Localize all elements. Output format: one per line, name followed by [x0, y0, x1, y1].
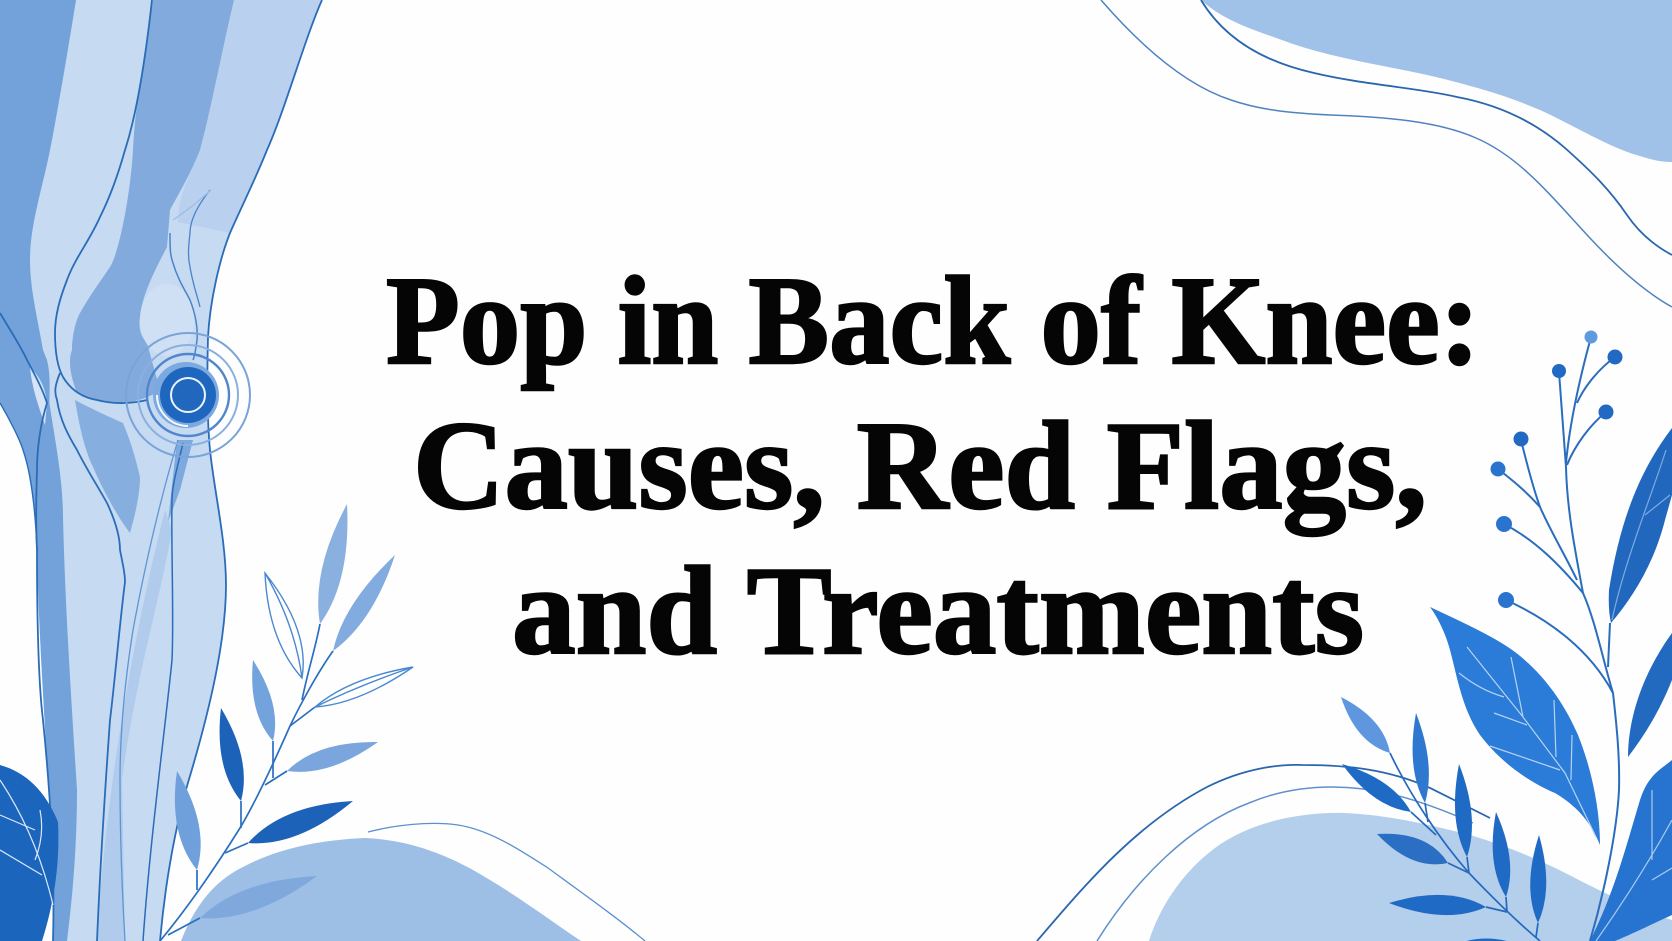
mid right leaf — [1628, 633, 1672, 757]
anatomy outline lines — [0, 0, 322, 941]
leaf — [1377, 834, 1448, 864]
lower translucent band — [97, 510, 172, 941]
leaf — [287, 742, 378, 772]
leaf — [175, 771, 201, 870]
outlined leaf — [315, 667, 413, 707]
pain target rings on knee — [126, 333, 250, 457]
medium muscle mass — [70, 0, 234, 403]
outlined leaf — [265, 573, 303, 678]
sprig stems — [1498, 337, 1619, 941]
leaf — [200, 876, 317, 918]
bottom right blob — [1149, 813, 1672, 941]
branch stems — [160, 624, 333, 941]
top right wave blob — [1201, 0, 1672, 162]
leaf — [1493, 812, 1510, 897]
lower right leaf — [1590, 760, 1672, 941]
leaf at bottom edge — [1455, 938, 1520, 941]
top right wave lines — [1101, 0, 1672, 307]
bottom right wave lines — [1037, 765, 1490, 941]
pale highlight at joint — [30, 367, 47, 425]
leaf — [1341, 697, 1390, 753]
leaf — [1413, 713, 1429, 803]
bottom left blob — [181, 838, 581, 941]
lower muscle — [75, 400, 140, 533]
leaf — [252, 660, 275, 741]
branch stems — [1390, 753, 1540, 941]
leaf — [333, 555, 395, 651]
dark leaf — [220, 708, 244, 801]
title line 2: Causes, Red Flags, — [413, 397, 1427, 536]
kneecap patch — [140, 284, 194, 356]
title line 1: Pop in Back of Knee: — [386, 252, 1480, 391]
dark leaf — [248, 801, 353, 843]
leaf — [1389, 895, 1486, 915]
leaf — [1530, 835, 1546, 923]
title — [386, 252, 1480, 681]
left leaf branch — [160, 504, 413, 941]
title line 3: and Treatments — [512, 542, 1364, 681]
leaf — [1455, 764, 1472, 857]
leaf — [1342, 764, 1411, 812]
right large leaves — [1430, 428, 1672, 941]
large central leaf — [1430, 607, 1600, 845]
dark thigh and calf band — [0, 0, 77, 941]
upper right leaf — [1609, 428, 1672, 623]
knee and leg illustration — [0, 0, 322, 941]
right berry sprig — [1490, 330, 1622, 941]
leaf — [318, 504, 347, 624]
tendon band — [168, 440, 193, 522]
bottom left wave line — [368, 823, 645, 941]
bottom left dark leaf — [0, 765, 58, 941]
upper band shading — [178, 0, 322, 233]
berries — [1490, 330, 1622, 608]
leg silhouette — [0, 0, 322, 941]
bottom right leaf branch — [1341, 697, 1546, 941]
